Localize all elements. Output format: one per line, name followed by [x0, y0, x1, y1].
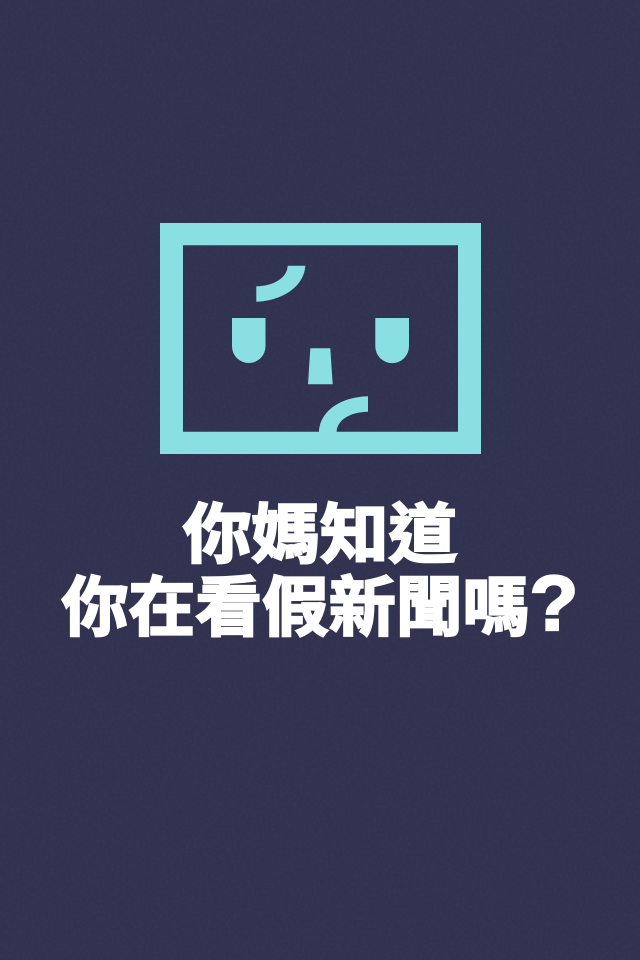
screen frame — [160, 223, 481, 454]
right eye — [375, 318, 409, 363]
icon: confused TV face — [160, 223, 481, 454]
eyebrow — [256, 266, 305, 302]
nose — [308, 348, 333, 384]
title line 2: 你在看假新聞嗎? — [62, 559, 578, 647]
left eye — [232, 318, 266, 363]
title line 1: 你媽知道 — [183, 498, 457, 571]
mouth — [319, 396, 368, 432]
